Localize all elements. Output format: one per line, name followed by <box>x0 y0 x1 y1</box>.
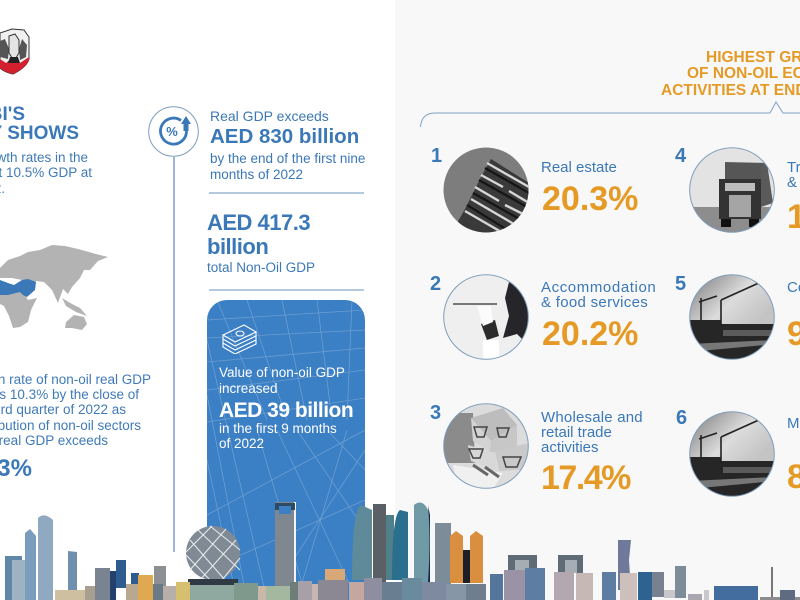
heading: highest growth <box>661 49 800 99</box>
timeline line <box>173 157 174 552</box>
item 2: accommodation: Accommodation <box>541 279 656 296</box>
low-rise strip <box>55 575 705 600</box>
item 1: real estate <box>431 145 638 232</box>
item 3: wholesale <box>430 402 643 497</box>
item 1: real estate: 1 <box>431 145 442 167</box>
panel: right background <box>395 0 800 600</box>
text block: real GDP: AED 830 billion <box>210 125 359 148</box>
text block: non-oil GDP: billion <box>207 234 268 259</box>
text block: real GDP: by the end of the first nine <box>210 151 365 166</box>
item 3: wholesale: 3 <box>430 402 441 424</box>
central towers <box>275 502 483 590</box>
bracket <box>420 101 800 127</box>
panel: value of non-oil GDP: of 2022 <box>219 436 264 451</box>
item 2: accommodation <box>430 273 656 360</box>
text block: real GDP <box>210 108 365 182</box>
dome <box>186 526 240 585</box>
item 4: transport <box>675 146 800 234</box>
item 2: accommodation: 2 <box>430 273 441 295</box>
chart: world map <box>0 245 108 330</box>
panel: value of non-oil GDP: AED 39 billion <box>219 399 353 422</box>
panel: value of non-oil GDP: increased <box>219 381 278 396</box>
item 1: real estate: Real estate <box>541 159 617 176</box>
icon: percent growth <box>148 106 199 157</box>
item 3: wholesale: retail trade <box>541 424 612 441</box>
item 3: wholesale: activities <box>541 439 599 456</box>
item 2: accommodation: 20.2% <box>542 315 638 353</box>
item 5: construction <box>675 274 800 360</box>
heading: main title <box>0 104 79 144</box>
icon: percent growth: % <box>166 124 178 139</box>
item 1: real estate: 20.3% <box>542 180 638 218</box>
panel: value of non-oil GDP <box>207 300 365 600</box>
icon: banknotes <box>222 324 257 354</box>
panel: value of non-oil GDP: in the first 9 months <box>219 421 337 436</box>
text block: intro <box>0 150 92 196</box>
text block: non-oil GDP: AED 417.3 <box>207 210 310 235</box>
icon: emblem <box>0 28 30 74</box>
item 3: wholesale: 17.4% <box>541 459 630 497</box>
text block: real GDP: months of 2022 <box>210 167 303 182</box>
item 6: manufacturing <box>676 408 800 497</box>
item 2: accommodation: & food services <box>541 294 648 311</box>
left towers <box>5 515 166 600</box>
text block: real GDP: Real GDP exceeds <box>210 108 329 124</box>
text block: non-oil growth <box>0 372 151 448</box>
text block: value increase: Value of non-oil GDP <box>219 365 345 380</box>
illustration: city skyline <box>5 502 800 600</box>
right towers <box>490 540 800 600</box>
text block: non-oil GDP: total Non-Oil GDP <box>207 260 315 275</box>
item 3: wholesale: Wholesale and <box>541 409 643 426</box>
text block: non-oil GDP <box>207 210 315 275</box>
